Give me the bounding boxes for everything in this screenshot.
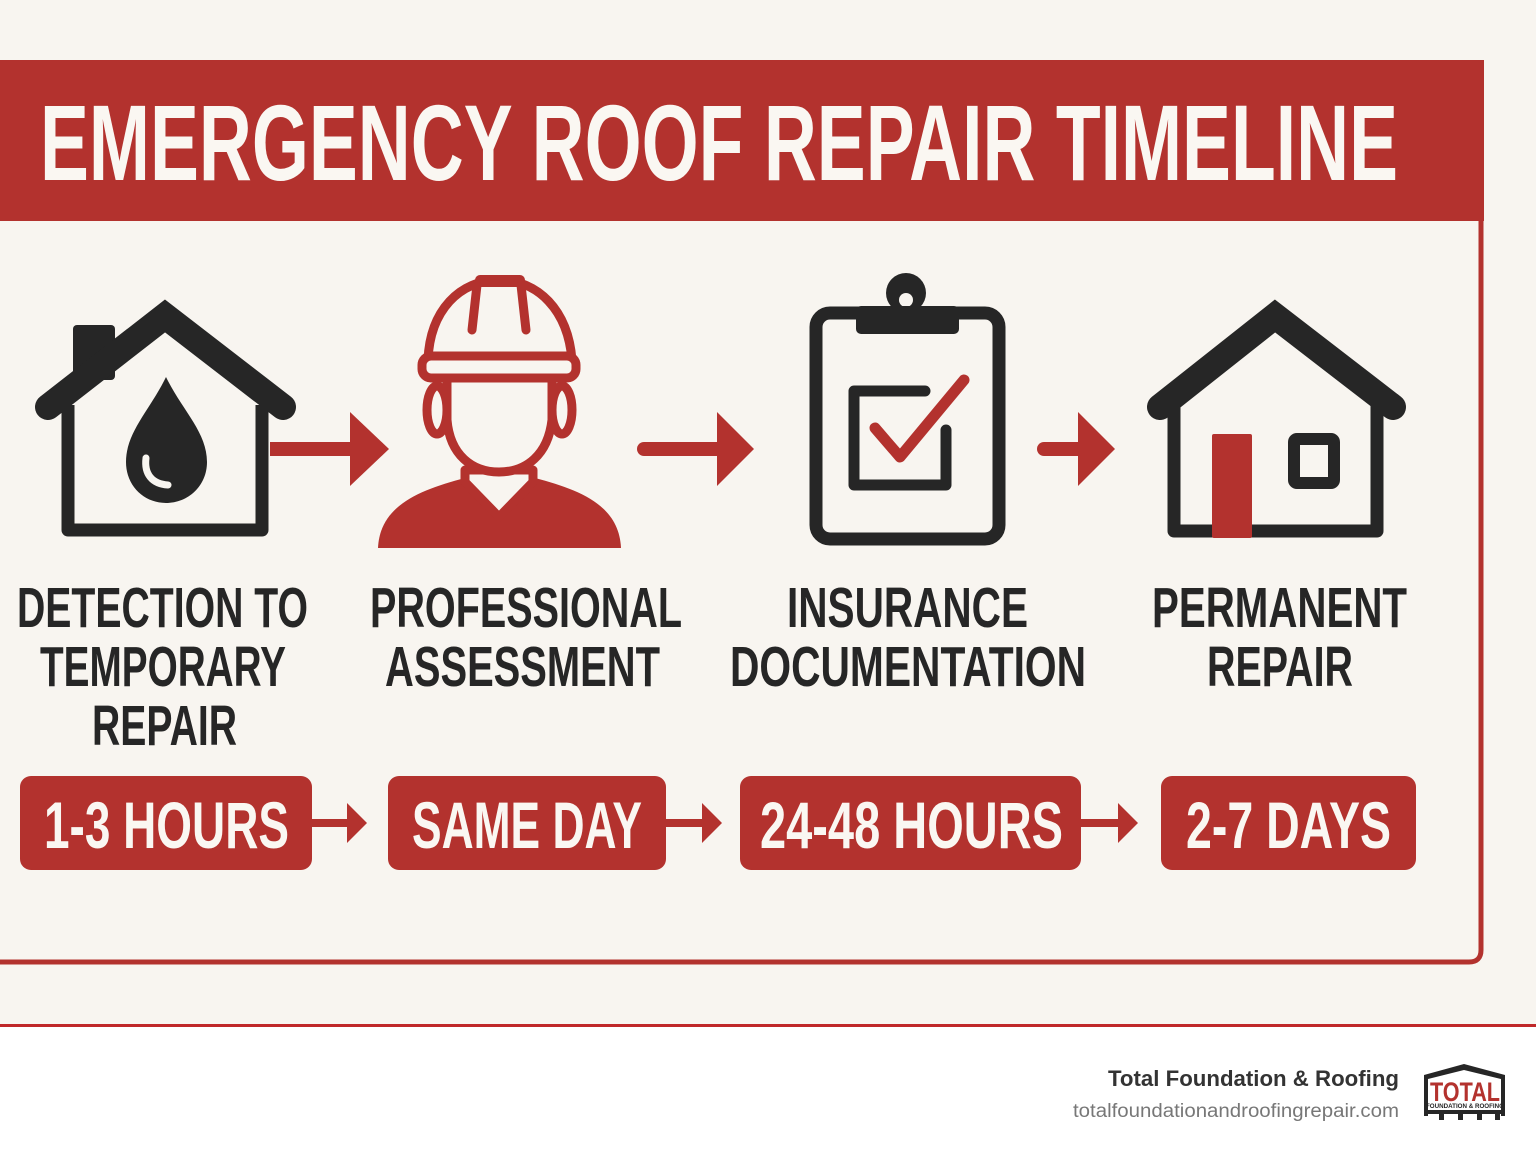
step labels: PROFESSIONAL xyxy=(370,576,682,640)
time pills: 24-48 HOURS xyxy=(760,788,1063,862)
step labels: PERMANENT xyxy=(1152,576,1407,640)
arrow 3 xyxy=(1037,412,1115,486)
time pills: SAME DAY xyxy=(412,788,642,862)
time pills: 1-3 HOURS xyxy=(44,788,289,862)
title banner xyxy=(0,60,1484,221)
step labels: TEMPORARY xyxy=(40,635,286,699)
small arrows xyxy=(312,803,1138,843)
footer: totalfoundationandroofingrepair.com xyxy=(1073,1101,1399,1122)
step labels: INSURANCE xyxy=(787,576,1028,640)
footer brand text: Total Foundation & Roofing xyxy=(1108,1066,1399,1091)
logo: TOTAL xyxy=(1430,1077,1500,1107)
icon: house with water drop xyxy=(48,316,283,530)
footer xyxy=(0,1024,1536,1154)
step labels: REPAIR xyxy=(92,694,237,758)
step labels: DETECTION TO xyxy=(17,576,308,640)
step labels: ASSESSMENT xyxy=(385,635,660,699)
logo: FOUNDATION & ROOFING xyxy=(1426,1104,1504,1110)
frame xyxy=(0,215,1481,962)
icon: clipboard xyxy=(816,273,999,539)
arrow 1 xyxy=(270,412,389,486)
icon: repaired house xyxy=(1160,316,1393,538)
arrow 2 xyxy=(637,412,754,486)
logo xyxy=(1424,1064,1505,1120)
step labels: DOCUMENTATION xyxy=(730,635,1086,699)
step labels: REPAIR xyxy=(1207,635,1353,699)
time pills xyxy=(20,776,1416,870)
time pills: 2-7 DAYS xyxy=(1186,788,1391,862)
step labels xyxy=(17,576,1407,758)
icon: worker xyxy=(378,275,621,548)
